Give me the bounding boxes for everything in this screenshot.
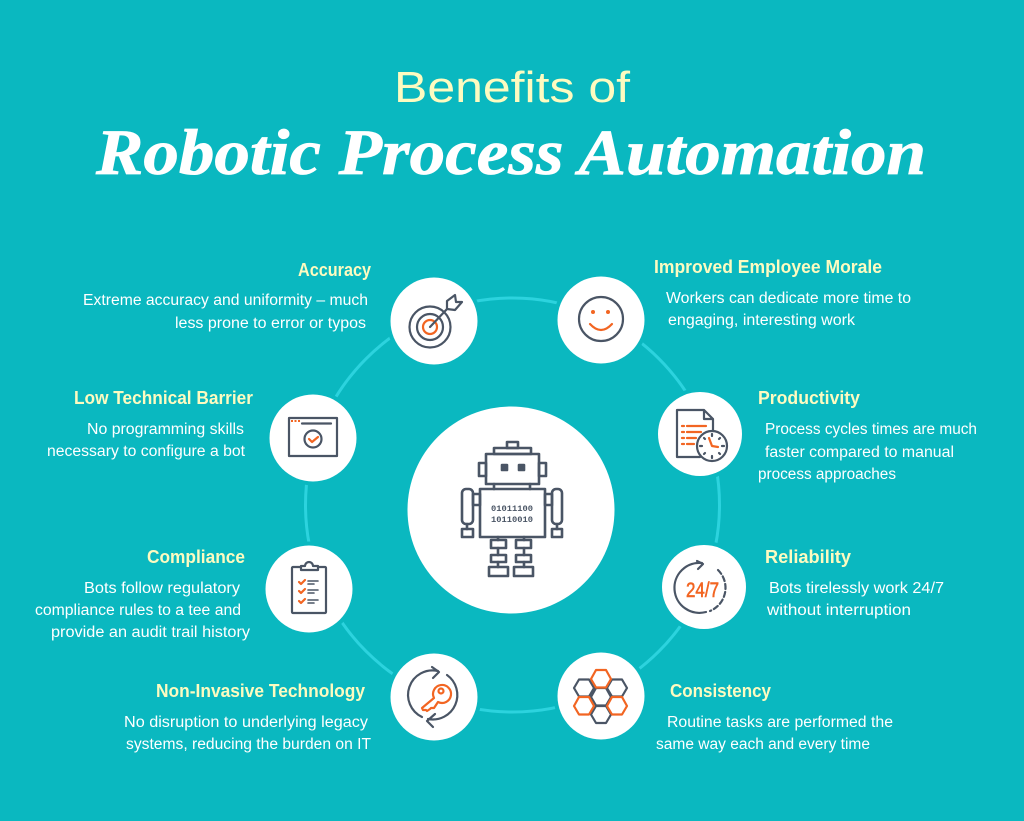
central robot: 10110010 — [491, 515, 533, 525]
text: Compliance: provide an audit trail history — [51, 624, 250, 641]
text: Low Technical Barrier: necessary to configure a bot — [47, 443, 246, 460]
text: Non-Invasive Technology: No disruption to underlying legacy — [124, 714, 368, 731]
text: Accuracy: Extreme accuracy and uniformity – much — [83, 292, 368, 309]
text: Reliability: Bots tirelessly work 24/7 — [769, 580, 944, 597]
text: Consistency: Consistency — [670, 681, 771, 701]
text: Improved Employee Morale: Improved Employee Morale — [654, 257, 882, 277]
text: Non-Invasive Technology: systems, reducing the burden on IT — [126, 736, 372, 753]
text: Productivity — [758, 388, 977, 483]
text: Non-Invasive Technology — [124, 681, 372, 753]
icon: clipboard — [266, 546, 352, 632]
text: Productivity: Process cycles times are much — [765, 421, 977, 438]
text: Consistency: Routine tasks are performed the — [667, 714, 893, 731]
text: Compliance: compliance rules to a tee and — [35, 602, 241, 619]
text: Productivity: process approaches — [758, 466, 896, 483]
text: Compliance — [35, 547, 250, 641]
text: Improved Employee Morale: engaging, interesting work — [668, 312, 855, 329]
icon: robot — [462, 442, 562, 576]
text: Reliability — [765, 547, 944, 619]
icon: 24/7: 24/7 — [686, 579, 719, 602]
central robot: 01011100 — [491, 504, 533, 514]
icon: browser window — [270, 394, 356, 482]
icon: honeycomb — [558, 652, 644, 740]
title — [95, 63, 926, 189]
icon: smiley — [558, 276, 644, 364]
icon: key with cycle arrows — [390, 654, 478, 740]
text: Consistency: same way each and every time — [656, 736, 870, 753]
text: Reliability: Reliability — [765, 547, 851, 567]
text: Non-Invasive Technology: Non-Invasive Technology — [156, 681, 365, 701]
text: Accuracy: less prone to error or typos — [175, 315, 366, 332]
text: Low Technical Barrier: Low Technical Barrier — [74, 388, 253, 408]
icon: 24/7 — [662, 545, 746, 629]
text: Consistency — [656, 681, 893, 753]
title: Benefits of — [394, 63, 631, 112]
text: Accuracy — [83, 260, 371, 332]
icon: document and clock — [658, 392, 742, 476]
text: Accuracy: Accuracy — [298, 260, 371, 280]
text: Reliability: without interruption — [766, 602, 911, 619]
text: Productivity: faster compared to manual — [765, 444, 954, 461]
text: Compliance: Compliance — [147, 547, 245, 567]
central robot — [408, 406, 614, 614]
text: Improved Employee Morale — [654, 257, 911, 329]
text: Productivity: Productivity — [758, 388, 860, 408]
title: Robotic Process Automation — [95, 117, 926, 189]
text: Low Technical Barrier — [47, 388, 253, 460]
text: Improved Employee Morale: Workers can dedicate more time to — [666, 290, 911, 307]
text: Compliance: Bots follow regulatory — [84, 580, 240, 597]
text: Low Technical Barrier: No programming skills — [87, 421, 244, 438]
icon: target — [390, 278, 478, 364]
